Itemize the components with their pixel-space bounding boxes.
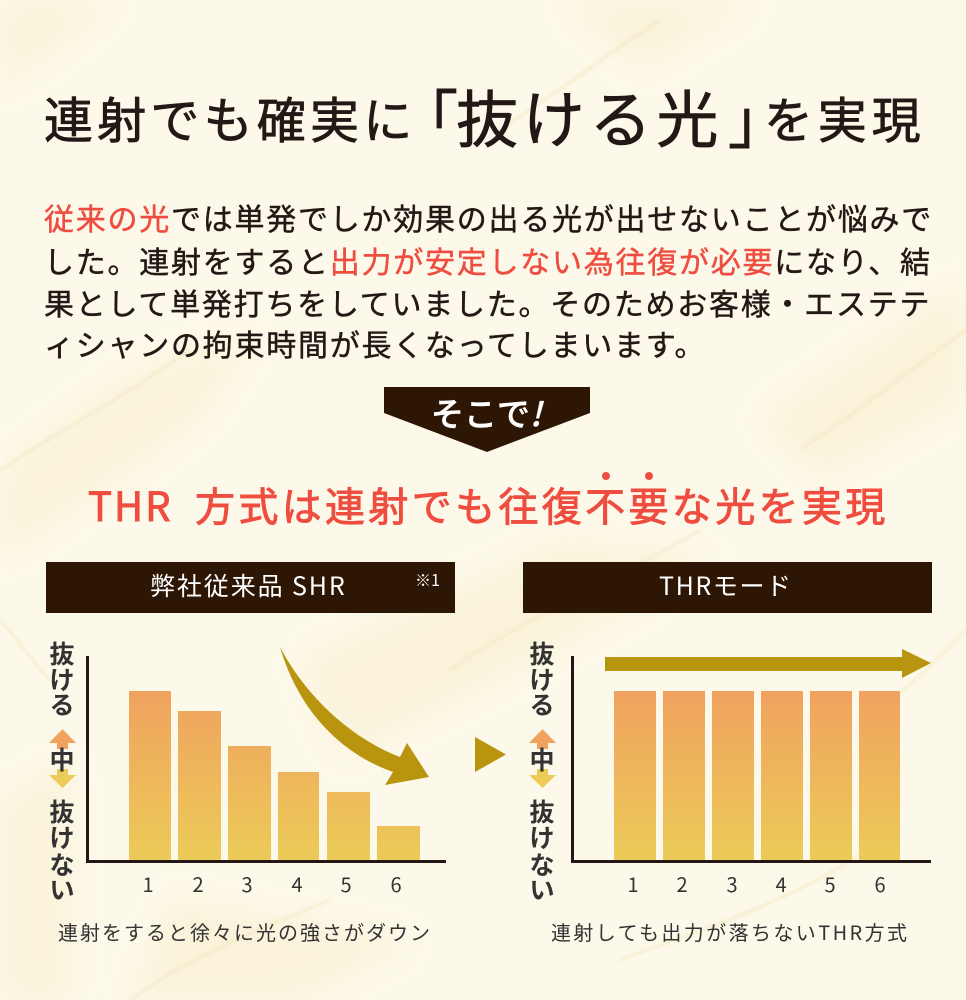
title: を実現 xyxy=(764,82,925,153)
arrow: downward curve xyxy=(280,647,429,785)
y axis labels right: る xyxy=(529,686,554,722)
title: 連射でも確実に xyxy=(44,82,416,153)
y axis labels right: 中 xyxy=(529,741,554,777)
chart: SHR bars: 2 xyxy=(192,869,204,898)
panel header: SHR: 弊社従来品 SHR xyxy=(150,567,347,603)
chart: THR bars: 5 xyxy=(824,869,836,898)
title: 抜ける光 xyxy=(456,70,723,160)
y axis labels right: 抜 xyxy=(529,635,554,671)
y axis labels left: 抜 xyxy=(49,793,74,829)
title: 」 xyxy=(728,74,788,161)
panel header: SHR xyxy=(46,562,455,613)
chart: THR bars: 4 xyxy=(775,869,787,898)
chart: THR bars: 3 xyxy=(726,869,738,898)
chart: THR bars: 6 xyxy=(874,869,886,898)
caption left: 連射をすると徐々に光の強さがダウン xyxy=(58,917,432,946)
y axis labels right: い xyxy=(529,871,554,907)
caption right: 連射しても出力が落ちないTHR方式 xyxy=(551,917,909,946)
panel header: THR xyxy=(523,562,932,613)
body text: 果として単発打ちをしていました。そのためお客様・エステテ xyxy=(44,280,931,324)
chart: SHR bars: 5 xyxy=(340,869,352,898)
title: 「 xyxy=(398,71,458,158)
callout: そこで!: そこで! xyxy=(431,388,541,436)
chart: SHR bars: 6 xyxy=(390,869,402,898)
chart: SHR bars: 3 xyxy=(241,869,253,898)
y axis labels right xyxy=(529,635,556,907)
y axis labels right: 抜 xyxy=(529,793,554,829)
body text xyxy=(44,195,933,365)
y axis labels right: な xyxy=(529,846,554,882)
red headline: 方式は連射でも往復不要な光を実現 xyxy=(195,475,889,533)
chart: THR bars: 1 xyxy=(627,869,639,898)
y axis labels left: る xyxy=(49,686,74,722)
chart: THR bars: 2 xyxy=(676,869,688,898)
y axis labels left: 抜 xyxy=(49,635,74,671)
chart: SHR bars: 4 xyxy=(291,869,303,898)
y axis labels left: 中 xyxy=(49,741,74,777)
panel header: SHR: ※1 xyxy=(415,567,440,591)
callout: そこで! xyxy=(384,387,590,452)
body text: した。連射をすると出力が安定しない為往復が必要になり、結 xyxy=(44,238,932,282)
title xyxy=(44,70,925,161)
body text: 従来の光では単発でしか効果の出る光が出せないことが悩みで xyxy=(44,195,933,239)
y axis labels left: け xyxy=(49,661,74,697)
y axis labels right: け xyxy=(529,819,554,855)
y axis labels right: け xyxy=(529,661,554,697)
arrow: between panels xyxy=(475,737,506,772)
y axis labels left: な xyxy=(49,846,74,882)
y axis labels left xyxy=(49,635,76,907)
y axis labels left: け xyxy=(49,819,74,855)
panel header: THR: THRモード xyxy=(659,567,793,603)
y axis labels left: い xyxy=(49,871,74,907)
red headline: THR xyxy=(88,475,172,533)
arrow: flat right xyxy=(605,649,931,678)
body text: ィシャンの拘束時間が長くなってしまいます。 xyxy=(44,321,706,365)
chart: SHR bars: 1 xyxy=(142,869,154,898)
